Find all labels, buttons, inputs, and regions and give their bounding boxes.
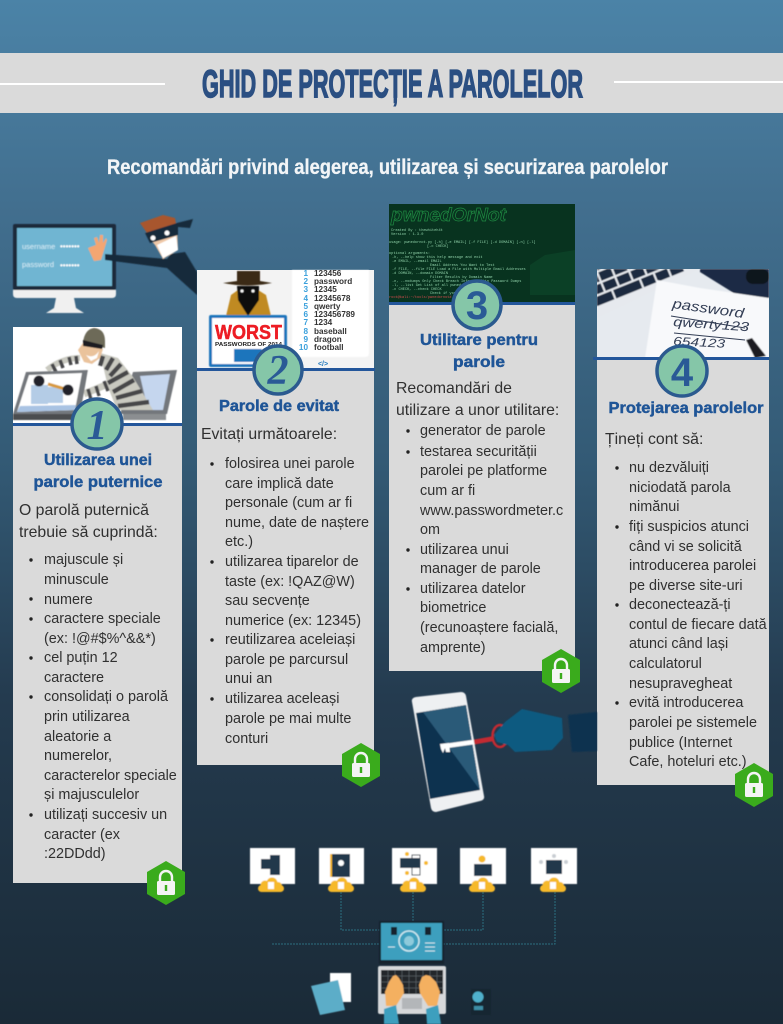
account cards bbox=[250, 848, 577, 884]
text 2: conturi bbox=[225, 731, 268, 747]
password list: 123456 bbox=[314, 269, 342, 278]
password list: 8 bbox=[303, 327, 308, 336]
image: terminal: [-c CHECK] bbox=[427, 244, 449, 249]
text 2: utilizarea aceleași bbox=[225, 691, 339, 707]
icon: lock 4 bbox=[735, 763, 773, 807]
text 3: om bbox=[420, 522, 440, 538]
icon: lock 1 bbox=[147, 861, 185, 905]
text 2: utilizarea tiparelor de bbox=[225, 554, 359, 570]
password list: 1234 bbox=[314, 318, 333, 327]
illustration: phone and key bbox=[412, 692, 597, 812]
password list bbox=[299, 269, 355, 352]
text 4: Cafe, hoteluri etc.) bbox=[629, 754, 747, 770]
text 3: parolei pe platforme bbox=[420, 463, 547, 479]
heading 3 bbox=[420, 332, 538, 371]
text 4: când vi se solicită bbox=[629, 539, 742, 555]
text 2: etc.) bbox=[225, 534, 253, 550]
image: terminal: optional arguments: bbox=[389, 251, 430, 256]
text 1: O parolă puternică bbox=[19, 502, 149, 519]
password list: 1 bbox=[303, 269, 308, 278]
password list: 12345 bbox=[314, 285, 337, 294]
password list: 7 bbox=[303, 318, 308, 327]
text 1: caracterelor speciale bbox=[44, 768, 177, 784]
text 4: pe diverse site-uri bbox=[629, 578, 743, 594]
subtitle: Recomandări privind alegerea, utilizarea și securizarea parolelor bbox=[107, 156, 668, 179]
badge 2: 2 bbox=[266, 348, 288, 394]
text 4: contul de fiecare dată bbox=[629, 617, 767, 633]
illustration: hacker at monitor: username bbox=[22, 242, 55, 251]
text 1: prin utilizarea bbox=[44, 709, 130, 725]
text 4: evită introducerea bbox=[629, 695, 743, 711]
icon: lock 3 bbox=[542, 649, 580, 693]
text 2: sau secvențe bbox=[225, 593, 310, 609]
image: terminal bbox=[389, 204, 575, 302]
badge 4 bbox=[657, 346, 707, 396]
photo: notebook: qwerty123 bbox=[673, 314, 751, 334]
image: terminal: -f FILE, --file FILE Load a File with Multiple Email Addresses bbox=[392, 267, 526, 272]
text 1: trebuie să cuprindă: bbox=[19, 524, 158, 541]
text 2: folosirea unei parole bbox=[225, 456, 355, 472]
text 3: cum ar fi bbox=[420, 483, 475, 499]
photo: notebook: password bbox=[670, 295, 747, 321]
text 3: (recunoaștere facială, bbox=[420, 620, 558, 636]
illustration: bottom network of secured accounts bbox=[250, 848, 577, 1024]
image: terminal: usage: pwnedornot.py [-h] [-e EMAIL] [-f FILE] [-d DOMAIN] [-n] [-l] bbox=[389, 240, 536, 245]
text 4: introducerea parolei bbox=[629, 558, 756, 574]
text 4: deconectează-ți bbox=[629, 597, 731, 613]
image: worst passwords bbox=[197, 269, 374, 369]
text 3: utilizarea datelor bbox=[420, 581, 526, 597]
badge 1: 1 bbox=[86, 403, 108, 449]
password list: 9 bbox=[303, 335, 308, 344]
text 4: nesupravegheat bbox=[629, 676, 732, 692]
text 1: aleatorie a bbox=[44, 729, 111, 745]
photo: notebook: 654123 bbox=[673, 334, 726, 351]
text 3: generator de parole bbox=[420, 423, 546, 439]
text 4: fiți suspicios atunci bbox=[629, 519, 749, 535]
image: terminal: -l, --list Get List of all pwned Domains bbox=[392, 283, 478, 288]
image: terminal: Created By : thewhiteh4t bbox=[391, 228, 443, 233]
text 1: cel puțin 12 bbox=[44, 650, 118, 666]
illustration: hacker at monitor: password bbox=[22, 260, 54, 269]
text 2: numerice (ex: 12345) bbox=[225, 613, 361, 629]
password list: password bbox=[314, 277, 352, 286]
text 1: :22DDdd) bbox=[44, 846, 106, 862]
image: terminal: -d DOMAIN, --domain DOMAIN bbox=[392, 271, 448, 276]
text 1: caractere bbox=[44, 670, 104, 686]
text 4: calculatorul bbox=[629, 656, 702, 672]
text 4 bbox=[605, 431, 767, 770]
password list: 4 bbox=[303, 294, 308, 303]
text 1: minuscule bbox=[44, 572, 109, 588]
text 4: atunci când lași bbox=[629, 636, 728, 652]
image: terminal: -c CHECK, --check CHECK bbox=[392, 287, 442, 292]
heading 3: Utilitare pentru bbox=[420, 332, 538, 349]
text 3: biometrice bbox=[420, 600, 486, 616]
text 4: publice (Internet bbox=[629, 735, 732, 751]
text 2: parole pe parcursul bbox=[225, 652, 348, 668]
heading 3: parole bbox=[453, 354, 505, 371]
text 3 bbox=[396, 380, 563, 656]
badge 3: 3 bbox=[466, 284, 488, 328]
image: terminal: Check if your Domain is pwned bbox=[430, 291, 493, 296]
text 4: Țineți cont să: bbox=[605, 431, 703, 448]
title banner bbox=[0, 53, 783, 113]
badge 1 bbox=[72, 399, 122, 449]
text 1: numere bbox=[44, 592, 93, 608]
image: terminal: root@kali:~/tools/pwnedornot# bbox=[389, 295, 452, 300]
password list: dragon bbox=[314, 335, 342, 344]
text 4: parolei pe sistemele bbox=[629, 715, 757, 731]
text 3: manager de parole bbox=[420, 561, 541, 577]
password list: 6 bbox=[303, 310, 308, 319]
folder and paper bbox=[311, 973, 351, 1015]
image: terminal: Filter Results by Domain Name bbox=[430, 275, 493, 280]
password list: 2 bbox=[303, 277, 308, 286]
badge 3 bbox=[453, 281, 501, 329]
text 4: niciodată parola bbox=[629, 480, 731, 496]
panel 2: passwords to avoid bbox=[197, 269, 375, 765]
password list: 123456789 bbox=[314, 310, 355, 319]
text 3: utilizare a unor utilitare: bbox=[396, 402, 559, 419]
text 2: nume, date de naștere bbox=[225, 515, 369, 531]
text 2: care implică date bbox=[225, 476, 334, 492]
password list: 3 bbox=[303, 285, 308, 294]
text 3: testarea securității bbox=[420, 444, 537, 460]
text 1: (ex: !@#$%^&&*) bbox=[44, 631, 156, 647]
password list: football bbox=[314, 343, 344, 352]
text 2: personale (cum ar fi bbox=[225, 495, 352, 511]
password list: baseball bbox=[314, 327, 347, 336]
image: worst passwords: </> bbox=[318, 361, 328, 368]
image: terminal: -h, --help show this help message and exit bbox=[392, 255, 483, 260]
text 2: taste (ex: !QAZ@W) bbox=[225, 574, 355, 590]
password list: 12345678 bbox=[314, 294, 351, 303]
illustration: hacker at monitor: ••••••• bbox=[60, 261, 80, 270]
text 1: consolidați o parolă bbox=[44, 689, 168, 705]
text 2: Evitați următoarele: bbox=[201, 426, 337, 443]
image: terminal: -e EMAIL, --email EMAIL bbox=[392, 259, 442, 264]
text 1: numerelor, bbox=[44, 748, 112, 764]
text 3: Recomandări de bbox=[396, 380, 512, 397]
image: terminal: Email Address You Want to Test bbox=[430, 263, 495, 268]
text 3: amprente) bbox=[420, 640, 486, 656]
text 3: utilizarea unui bbox=[420, 542, 509, 558]
text 2 bbox=[201, 426, 369, 747]
laptop bbox=[378, 921, 446, 1024]
panel 1: strong password bbox=[13, 327, 182, 883]
disc icon bbox=[471, 989, 491, 1015]
password list: 5 bbox=[303, 302, 308, 311]
panel 3: password tools bbox=[389, 204, 575, 671]
image: worst passwords: PASSWORDS OF 2014 bbox=[215, 342, 283, 348]
heading 2: Parole de evitat bbox=[219, 398, 339, 415]
badge 4: 4 bbox=[671, 351, 694, 395]
image: terminal: -n, --nodumps Only Check Breach Info and Skip Password Dumps bbox=[392, 279, 521, 284]
image: terminal: pwnedOrNot bbox=[390, 205, 507, 225]
heading 1: Utilizarea unei bbox=[44, 452, 152, 469]
heading 1 bbox=[34, 452, 163, 491]
text 1 bbox=[19, 502, 177, 862]
password list: 10 bbox=[299, 343, 308, 352]
heading 4: Protejarea parolelor bbox=[608, 400, 764, 417]
text 2: parole pe mai multe bbox=[225, 711, 351, 727]
heading 1: parole puternice bbox=[34, 474, 163, 491]
badge 2 bbox=[254, 346, 302, 394]
text 1: caractere speciale bbox=[44, 611, 161, 627]
image: terminal: Version : 1.3.0 bbox=[391, 232, 423, 237]
text 3: www.passwordmeter.c bbox=[419, 503, 563, 519]
text 2: unui an bbox=[225, 671, 272, 687]
security clouds bbox=[258, 878, 566, 892]
text 1: caracter (ex bbox=[44, 827, 121, 843]
text 1: și majusculelor bbox=[44, 787, 139, 803]
panel 4: protecting passwords bbox=[593, 269, 769, 785]
text 4: nu dezvăluiți bbox=[629, 460, 709, 476]
text 1: utilizați succesiv un bbox=[44, 807, 167, 823]
photo: burglar with laptops bbox=[13, 327, 182, 423]
illustration: hacker at monitor: ••••••• bbox=[60, 242, 80, 251]
password list: qwerty bbox=[314, 302, 341, 311]
icon: lock 2 bbox=[342, 743, 380, 787]
text 4: nimănui bbox=[629, 499, 679, 515]
image: worst passwords: WORST bbox=[215, 321, 282, 344]
text 2: reutilizarea aceleiași bbox=[225, 632, 355, 648]
text 1: majuscule și bbox=[44, 552, 123, 568]
illustration: hacker at monitor bbox=[13, 215, 197, 313]
photo: notebook bbox=[597, 269, 769, 357]
